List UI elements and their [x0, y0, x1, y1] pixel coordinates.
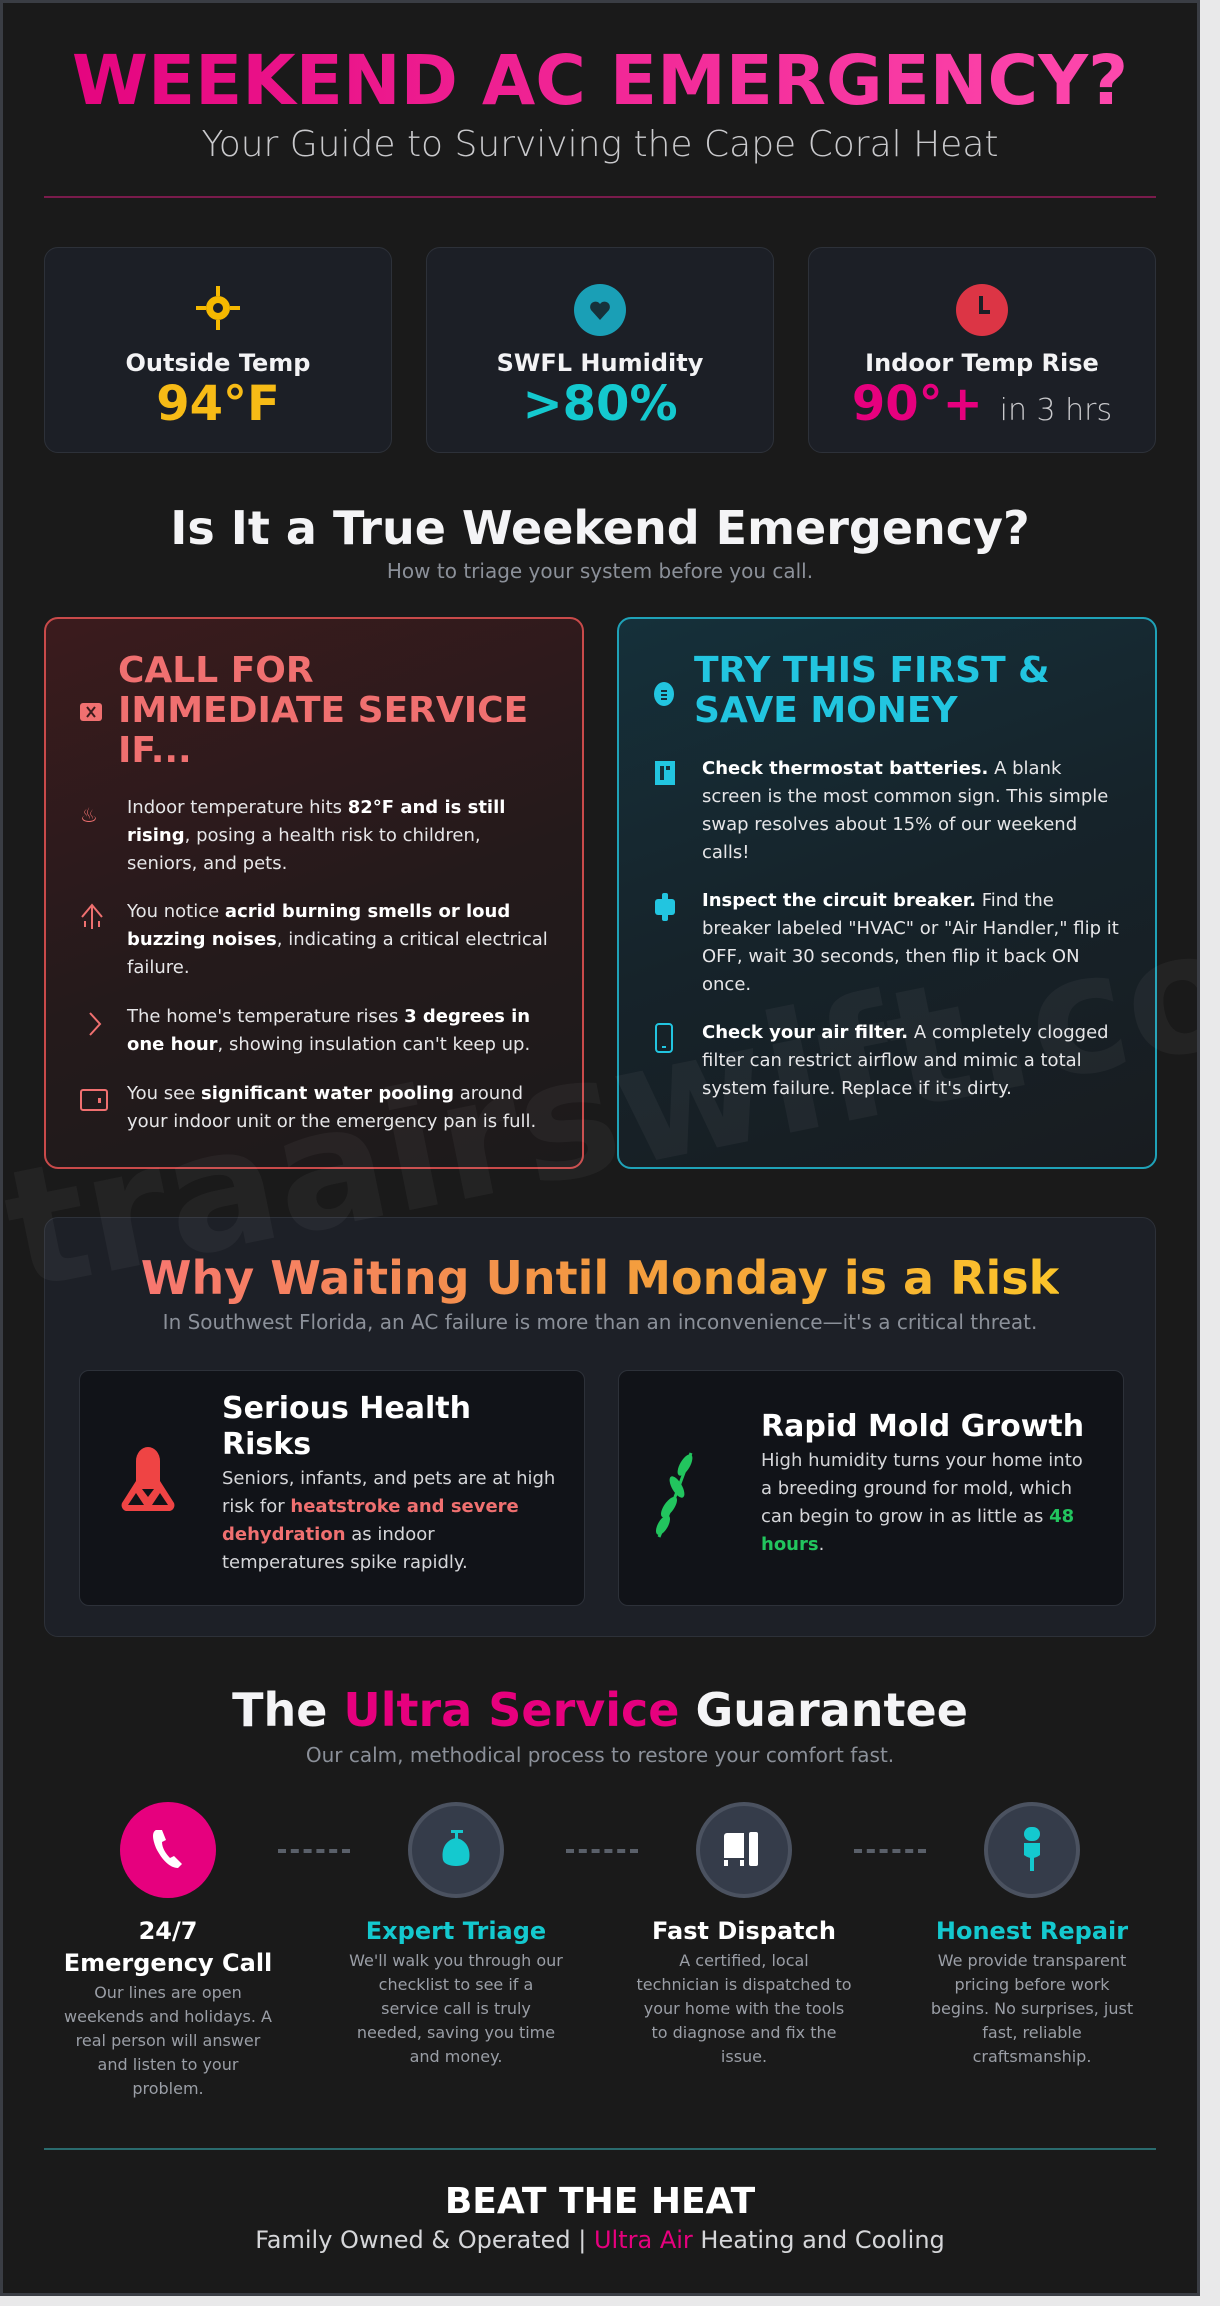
item 1: ♨ [80, 803, 98, 827]
subtitle: In Southwest Florida, an AC failure is more than an inconvenience—it's a critical threat. [163, 1310, 1037, 1334]
step: 24/7 call: real person will answer [76, 2031, 260, 2050]
icon: info [654, 682, 674, 706]
icon: phone [120, 1802, 216, 1898]
card: health risks [79, 1370, 585, 1606]
step: expert triage: service call is truly [381, 1999, 531, 2018]
panel: call for service: You notice acrid burning smells or loud buzzing noises, indicating a critical electrical failure. [127, 901, 548, 978]
step: honest repair: We provide transparent [938, 1951, 1126, 1970]
step: 24/7 call: and listen to your [98, 2055, 238, 2074]
step: expert triage: checklist to see if a [379, 1975, 533, 1994]
step: 24/7 call: problem. [132, 2079, 204, 2098]
step: fast dispatch [636, 1802, 852, 2066]
stat card: indoor rise: 90°+ in 3 hrs [852, 376, 1112, 432]
icon: triage [408, 1802, 504, 1898]
heading: CALL FOR [118, 650, 314, 691]
subtitle: Your Guide to Surviving the Cape Coral Heat [201, 124, 998, 165]
step: 24/7 call: Our lines are open [94, 1983, 242, 2002]
title: Rapid Mold Growth [761, 1409, 1084, 1444]
icon: truck [696, 1802, 792, 1898]
stat card: humidity: SWFL Humidity [497, 349, 703, 377]
panel: try this first [617, 617, 1157, 1169]
step: expert triage: We'll walk you through our [349, 1951, 563, 1970]
panel: try this first: Inspect the circuit breaker. Find the breaker labeled "HVAC" or "Air Handler," flip it OFF, wait 30 seconds, then flip it back ON once. [702, 890, 1119, 995]
heading: guarantee: The Ultra Service Guarantee [232, 1683, 968, 1737]
step: fast dispatch: technician is dispatched to [636, 1975, 852, 1994]
icon: alert [80, 703, 102, 721]
icon: clock [956, 284, 1008, 336]
panel: call for service: Indoor temperature hits 82°F and is still rising, posing a health risk to children, seniors, and pets. [127, 797, 505, 874]
item 3 [89, 1012, 102, 1036]
item 2 [655, 893, 675, 921]
item 1 [655, 761, 675, 785]
step: honest repair: craftsmanship. [973, 2047, 1091, 2066]
stat card: humidity: >80% [522, 376, 678, 432]
heading [118, 650, 528, 771]
stat card: indoor rise [808, 247, 1156, 453]
section subtitle: How to triage your system before you call. [387, 559, 813, 583]
panel: call for service: The home's temperature rises 3 degrees in one hour, showing insulation can't keep up. [127, 1006, 530, 1055]
step: honest repair: pricing before work [954, 1975, 1110, 1994]
footer tagline: Family Owned & Operated | Ultra Air Heating and Cooling [255, 2226, 945, 2254]
icon: person [122, 1447, 174, 1511]
step: fast dispatch: issue. [721, 2047, 767, 2066]
panel: try this first: Check your air filter. A completely clogged filter can restrict airflow and mimic a total system failure. Replace if it's dirty. [702, 1022, 1109, 1099]
step: expert triage: and money. [410, 2047, 502, 2066]
heading: TRY THIS FIRST & [694, 650, 1050, 691]
item 3 [655, 1023, 673, 1053]
heading: IMMEDIATE SERVICE [118, 690, 528, 731]
step: fast dispatch: A certified, local [679, 1951, 809, 1970]
section heading: emergency: Is It a True Weekend Emergency? [170, 501, 1030, 555]
panel: call for service [44, 617, 584, 1169]
title: Serious Health Risks [222, 1391, 471, 1462]
icon: sun [196, 286, 240, 330]
item 4 [80, 1089, 108, 1111]
step: honest repair [931, 1802, 1133, 2066]
guarantee subtitle: Our calm, methodical process to restore your comfort fast. [306, 1743, 894, 1767]
step: expert triage: needed, saving you time [357, 2023, 555, 2042]
step: 24/7 call: Emergency Call [64, 1949, 272, 1977]
stat card: outside temp: Outside Temp [126, 349, 310, 377]
step: honest repair: begins. No surprises, just [931, 1999, 1133, 2018]
step: 24/7 call [64, 1802, 272, 2098]
step: expert triage [349, 1802, 563, 2066]
step: fast dispatch: your home with the tools [644, 1999, 844, 2018]
stat card: indoor rise: Indoor Temp Rise [865, 349, 1099, 377]
footer heading: BEAT THE HEAT [445, 2181, 755, 2222]
panel: call for service: You see significant water pooling around your indoor unit or the emergency pan is full. [127, 1083, 536, 1132]
heading: Why Waiting Until Monday is a Risk [141, 1251, 1059, 1305]
stat card: outside temp: 94°F [156, 376, 280, 432]
step: honest repair: Honest Repair [936, 1917, 1128, 1945]
heading: IF... [118, 730, 192, 771]
step: 24/7 call: weekends and holidays. A [64, 2007, 272, 2026]
panel: why waiting is a risk [44, 1217, 1156, 1637]
icon: humidity [574, 284, 626, 336]
step: expert triage: Expert Triage [366, 1917, 546, 1945]
icon: leaf [656, 1452, 692, 1538]
step: 24/7 call: 24/7 [139, 1917, 197, 1945]
card: mold [618, 1370, 1124, 1606]
heading [694, 650, 1050, 731]
heading: SAVE MONEY [694, 690, 958, 731]
step: fast dispatch: Fast Dispatch [652, 1917, 836, 1945]
item 2 [81, 904, 103, 929]
step: honest repair: fast, reliable [982, 2023, 1082, 2042]
stat card: outside temp [44, 247, 392, 453]
text: Seniors, infants, and pets are at high risk for heatstroke and severe dehydration as indoor temperatures spike rapidly. [222, 1468, 555, 1573]
panel: try this first: Check thermostat batteries. A blank screen is the most common sign. This simple swap resolves about 15% of our weekend calls! [702, 758, 1108, 863]
text: High humidity turns your home into a breeding ground for mold, which can begin to grow in as little as 48 hours. [761, 1450, 1083, 1555]
step: fast dispatch: to diagnose and fix the [652, 2023, 836, 2042]
stat card: humidity [426, 247, 774, 453]
icon: wrench [984, 1802, 1080, 1898]
title: WEEKEND AC EMERGENCY? [72, 41, 1128, 121]
